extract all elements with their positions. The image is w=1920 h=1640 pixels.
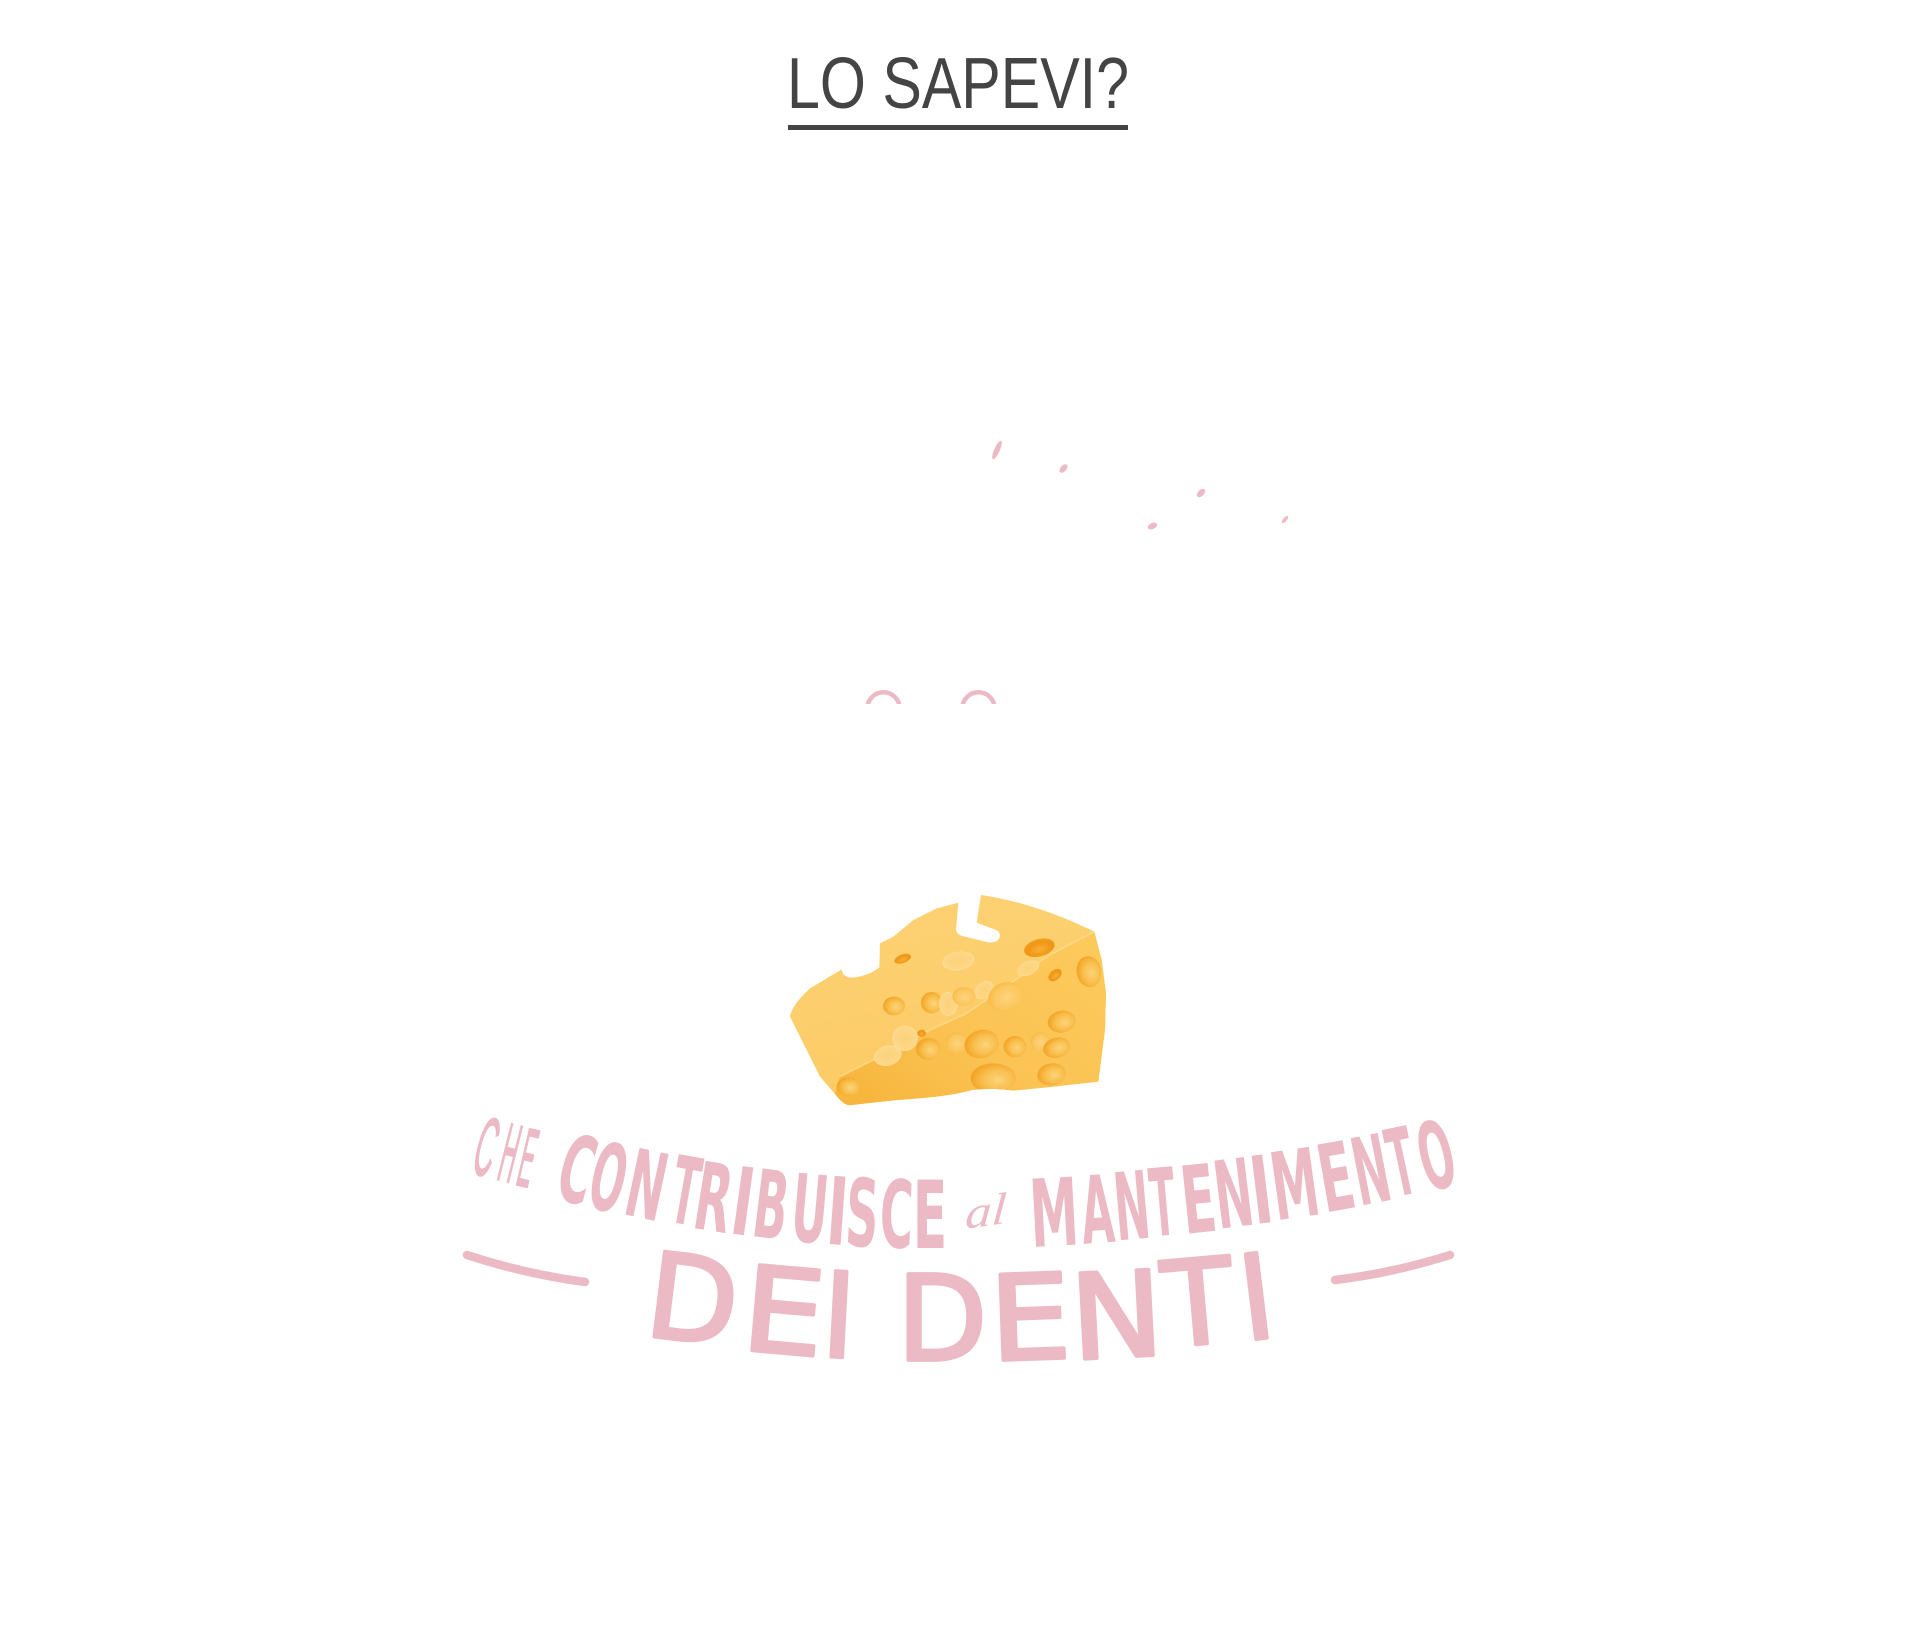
caption: dei denti: T [1156, 1233, 1240, 1375]
caption: mantenimento: M [1027, 1159, 1081, 1270]
caption: al: al [964, 1183, 1008, 1239]
caption: contribuisce: B [748, 1150, 794, 1262]
caption: dei denti: E [987, 1250, 1073, 1389]
tooth eyes [866, 690, 996, 704]
caption: mantenimento: M [1264, 1128, 1326, 1242]
caption: che: C [465, 1101, 508, 1195]
caption: mantenimento: O [1407, 1101, 1466, 1214]
caption: contribuisce: S [843, 1158, 881, 1269]
cheese front face [834, 932, 1106, 1106]
caption: contribuisce: U [787, 1154, 833, 1266]
caption: dei denti [639, 1227, 1281, 1389]
caption: che: E [511, 1111, 546, 1205]
caption: contribuisce: I [725, 1147, 761, 1258]
accent marks [990, 440, 1289, 531]
caption: mantenimento: A [1077, 1156, 1118, 1267]
caption: contribuisce: T [663, 1137, 708, 1249]
swoosh left [467, 1255, 585, 1282]
caption: contribuisce: R [687, 1142, 740, 1255]
caption: dei denti: I [1232, 1229, 1281, 1369]
caption: mantenimento: I [1244, 1135, 1278, 1246]
title: LO SAPEVI? [787, 44, 1129, 124]
swoosh right [1335, 1255, 1450, 1280]
caption: che [465, 1101, 546, 1205]
caption: mantenimento: N [1110, 1152, 1154, 1263]
caption: mantenimento: N [1344, 1115, 1399, 1228]
caption: dei denti: D [897, 1251, 987, 1388]
caption: dei denti: I [819, 1248, 859, 1386]
caption: contribuisce: O [579, 1123, 637, 1236]
cheese wedge [790, 895, 1106, 1106]
caption: contribuisce: C [547, 1113, 607, 1228]
caption: dei denti: N [1067, 1246, 1166, 1388]
caption: mantenimento: E [1176, 1145, 1221, 1257]
cheese ridge [840, 932, 1094, 1077]
cheese holes [837, 935, 1104, 1096]
caption: mantenimento: T [1378, 1108, 1426, 1220]
caption: contribuisce: I [823, 1157, 852, 1267]
caption: che: H [491, 1106, 529, 1200]
caption: mantenimento: N [1208, 1138, 1259, 1251]
caption: dei denti: D [639, 1227, 746, 1374]
cheese top face [790, 895, 1106, 1106]
caption: dei denti: E [737, 1242, 830, 1385]
caption: contribuisce: C [878, 1160, 915, 1270]
caption: contribuisce: N [617, 1128, 677, 1244]
caption: contribuisce: E [913, 1162, 947, 1271]
caption: mantenimento [1027, 1101, 1466, 1270]
caption: contribuisce [547, 1113, 947, 1271]
caption: mantenimento: E [1310, 1122, 1363, 1235]
caption: mantenimento: T [1146, 1149, 1181, 1260]
